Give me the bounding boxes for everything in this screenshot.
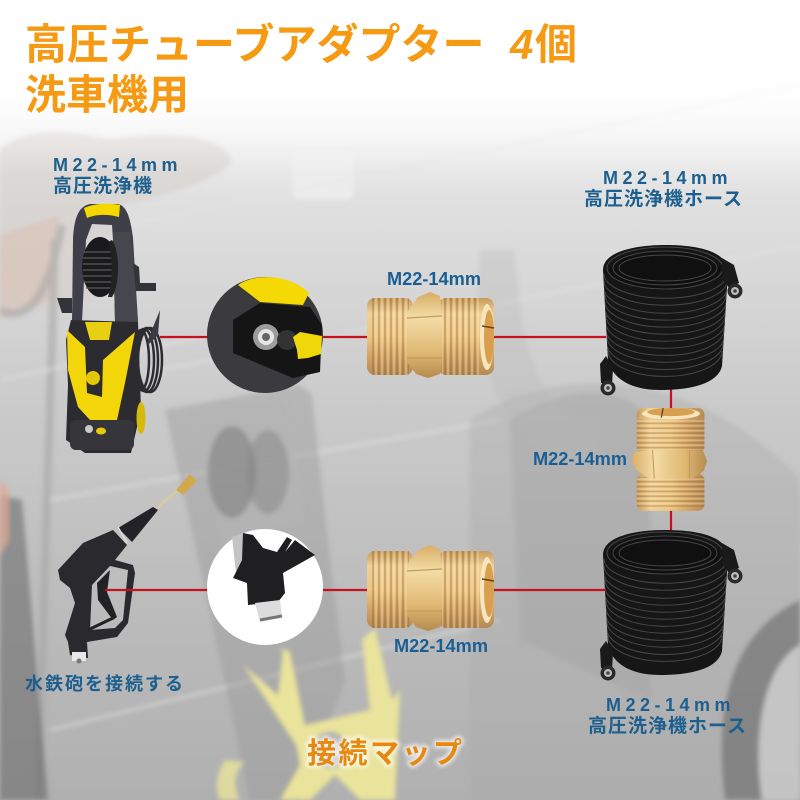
label: vertical adapter: M22-14mm xyxy=(533,449,627,469)
label: pressure washer: 高圧洗浄機 xyxy=(53,175,153,197)
label: bottom hose: M22-14mm xyxy=(606,695,735,715)
label: lower adapter: M22-14mm xyxy=(394,636,488,656)
title: 高圧チューブアダプター xyxy=(25,21,484,68)
adapter: lower horizontal xyxy=(367,545,494,631)
label: top hose: M22-14mm xyxy=(603,168,732,188)
adapter: top horizontal xyxy=(367,292,494,378)
label: pressure washer xyxy=(53,155,182,197)
connector lines xyxy=(160,337,671,590)
adapter: vertical xyxy=(631,408,707,511)
label: top hose: 高圧洗浄機ホース xyxy=(584,188,743,210)
label: bottom hose: 高圧洗浄機ホース xyxy=(588,715,747,737)
title: 4 xyxy=(509,21,533,68)
icon: pressure washer xyxy=(57,204,162,453)
faded yellow washer frame xyxy=(217,628,400,800)
label: pressure washer: M22-14mm xyxy=(53,155,182,175)
detail circle: washer outlet xyxy=(207,277,323,393)
title: 個 xyxy=(535,21,577,68)
label: top hose xyxy=(584,168,743,210)
caption: connection map: 接続マップ xyxy=(307,737,465,770)
title xyxy=(25,21,577,118)
label: bottom hose xyxy=(588,695,747,737)
title: 洗車機用 xyxy=(25,72,189,118)
white top fade xyxy=(0,0,800,175)
label: spray gun: 水鉄砲を接続する xyxy=(25,673,185,694)
detail circle: spray gun outlet xyxy=(207,529,323,645)
caption: connection map: 接続マップ xyxy=(307,737,465,770)
hose coil: top xyxy=(600,245,742,396)
hose coil: bottom xyxy=(600,530,742,680)
label: top adapter: M22-14mm xyxy=(387,269,481,289)
icon: spray gun xyxy=(58,474,208,664)
